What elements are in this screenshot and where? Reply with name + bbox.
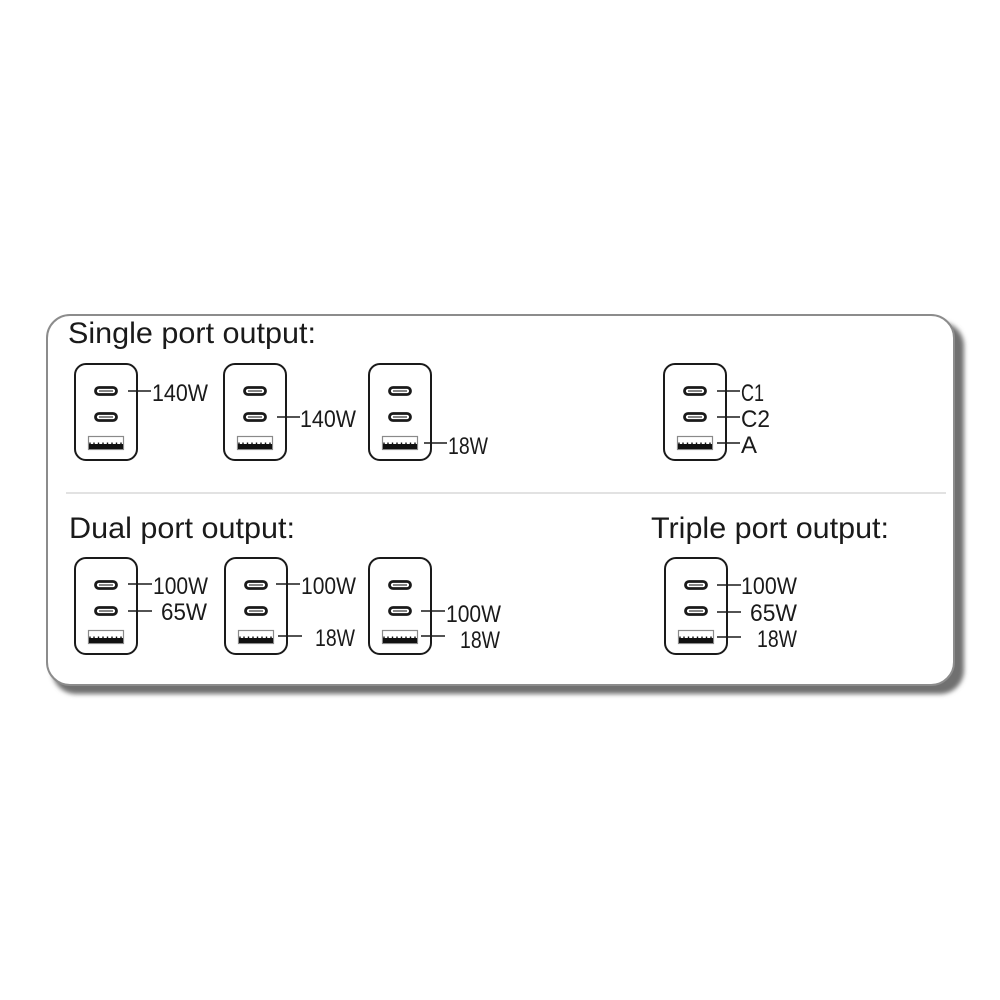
diagram: port legend C1 C2 A	[664, 364, 770, 460]
diagram: dual port C2 100W A 18W: 100W	[446, 601, 501, 628]
heading: single port output: Single port output:	[68, 317, 316, 350]
diagram: dual port C1 100W C2 65W: 65W	[161, 599, 207, 626]
diagram: single port C2 140W: 140W	[300, 406, 356, 433]
diagram: triple port 100W 65W 18W: 65W	[750, 600, 797, 627]
diagram: triple port 100W 65W 18W: 100W	[741, 573, 797, 600]
diagram: dual port C1 100W C2 65W: 100W	[153, 573, 208, 600]
diagram: single port A 18W: 18W	[448, 433, 488, 460]
diagram: dual port C1 100W C2 65W	[75, 558, 208, 654]
diagram: triple port 100W 65W 18W	[665, 558, 797, 654]
diagram: port legend C1 C2 A: C2	[741, 406, 770, 433]
diagram: single port C2 140W	[224, 364, 356, 460]
diagram: single port C1 140W	[75, 364, 208, 460]
diagram: dual port C2 100W A 18W	[369, 558, 501, 654]
diagram: single port C1 140W: 140W	[152, 380, 208, 407]
diagram: port legend C1 C2 A: C1	[741, 380, 764, 407]
diagram: dual port C2 100W A 18W: 18W	[460, 627, 500, 654]
diagram: dual port C1 100W A 18W: 100W	[301, 573, 356, 600]
diagram: port legend C1 C2 A: A	[741, 432, 757, 459]
diagram: dual port C1 100W A 18W	[225, 558, 356, 654]
diagram: triple port 100W 65W 18W: 18W	[757, 626, 797, 653]
diagram: dual port C1 100W A 18W: 18W	[315, 625, 355, 652]
panel: port output card	[47, 315, 964, 694]
heading: triple port output: Triple port output:	[651, 512, 889, 545]
diagram: single port A 18W	[369, 364, 488, 460]
heading: dual port output: Dual port output:	[69, 512, 295, 545]
